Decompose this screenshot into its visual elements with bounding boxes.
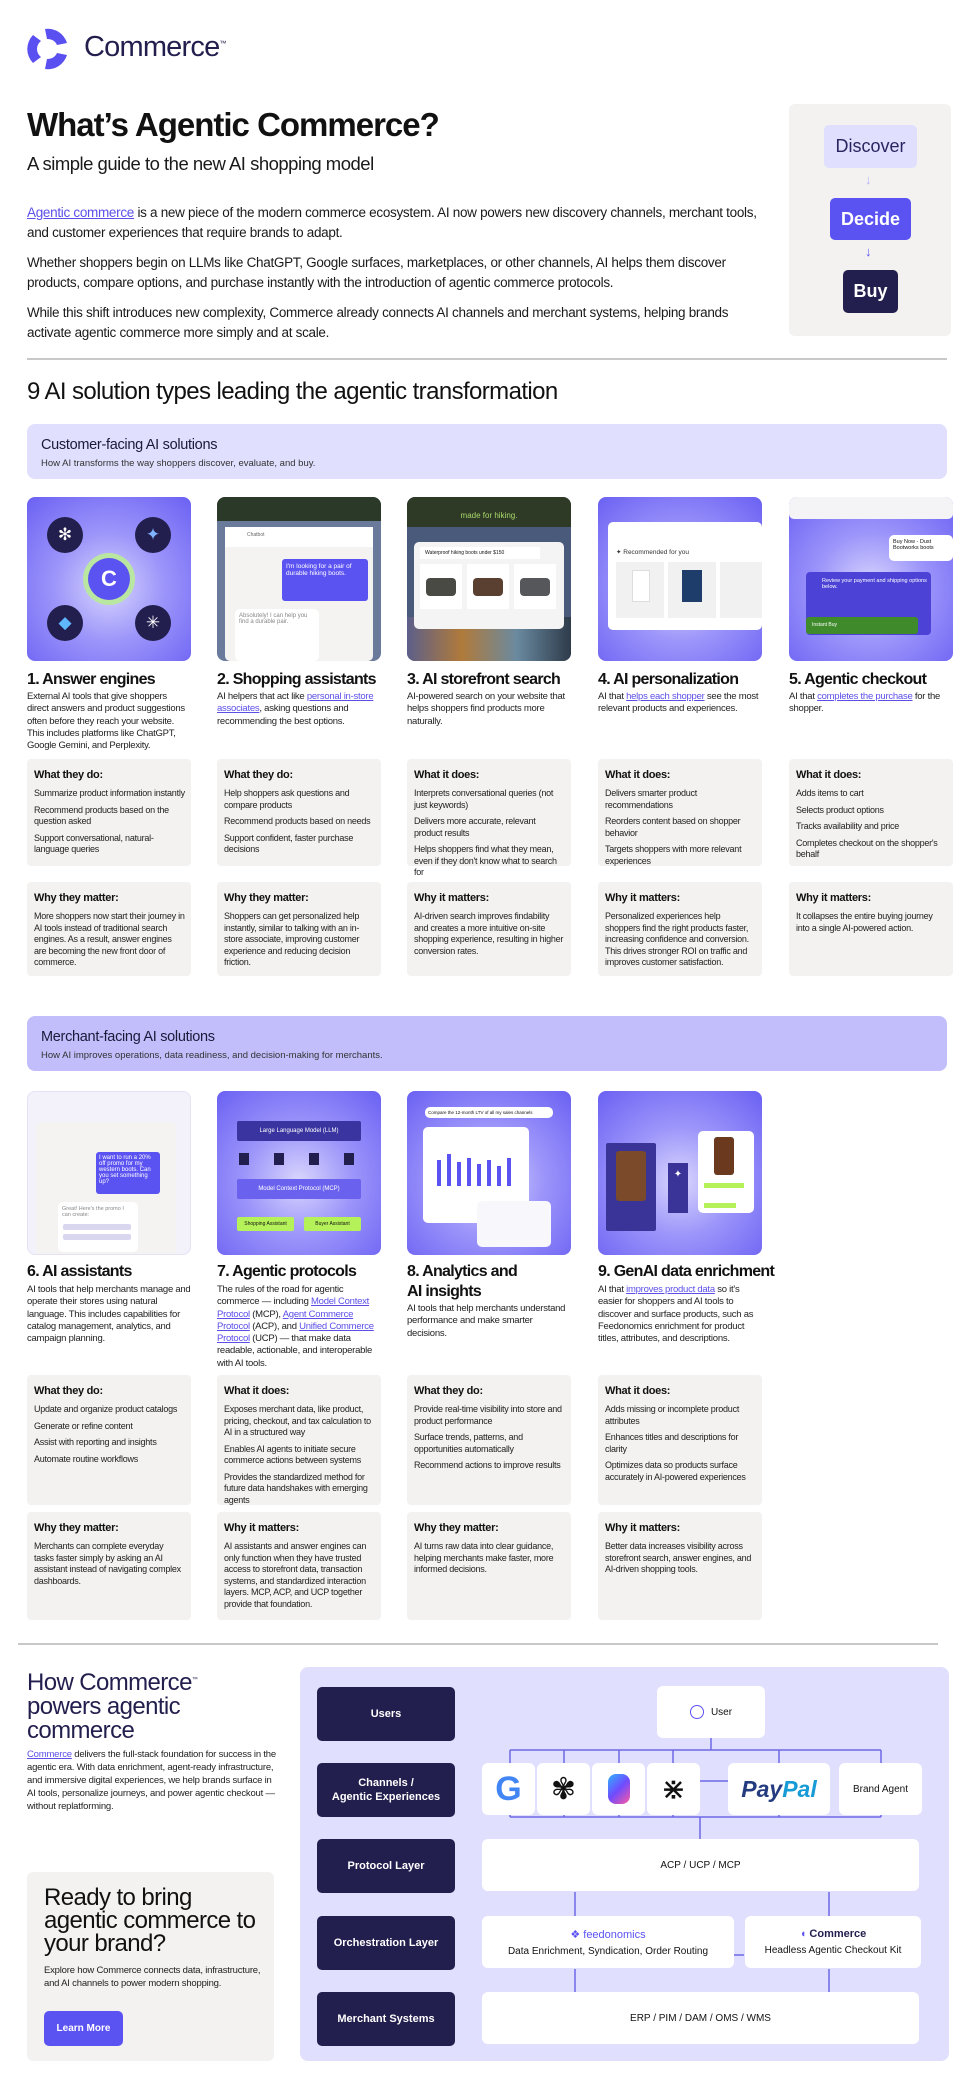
what box 9: Enhances titles and descriptions for clarity [605,1432,738,1454]
card 1 image: answer engines: ✦ [146,525,160,544]
why box 8: AI turns raw data into clear guidance, helping merchants make faster, more informed decisions. [414,1541,553,1574]
what box 1: Recommend products based on the question asked [34,804,169,826]
panel: discover decide buy flow: ↓ [865,172,872,187]
panel: discover decide buy flow: Decide [841,208,900,228]
heading: how commerce powers: How Commerce™ [27,1669,197,1696]
card 1 image: answer engines [27,497,191,661]
why box 5: It collapses the entire buying journey into a single AI-powered action. [796,911,933,932]
why box 4 [598,882,762,976]
panel: CTA: Explore how Commerce connects data, infrastructure, and AI channels to power modern shopping. [44,1965,260,1989]
label: protocol: Protocol Layer [347,1860,425,1872]
logo: paypal: Pal [782,1776,817,1802]
logo [27,28,226,70]
why box 5 [789,882,953,976]
what box 4: Reorders content based on shopper behavior [605,816,740,838]
card 8 image: analytics: Compare the 12-month LTV of all my sales channels [428,1110,532,1115]
text: The rules of the road for agentic commerce — including Model Context Protocol (MCP), Agent Commerce Protocol (ACP), and Unified Commerce Protocol (UCP) — that make data readable, actionable, and interoperable with AI tools. [217,1284,374,1369]
why box 9: Why it matters: [605,1522,680,1534]
card 1 image: answer engines: ◆ [58,613,72,632]
card 5 image: agentic checkout: Buy Now - Dust Bootworks boots [893,539,934,551]
section heading: 9 AI solution types leading the agentic transformation [27,378,558,405]
label: channels [317,1763,455,1817]
why box 2 [217,882,381,976]
what box 2: What they do: [224,769,293,781]
what box 1 [27,759,191,866]
card 7 image: agentic protocols: Model Context Protocol (MCP) [258,1186,340,1192]
panel: customer-facing header: How AI transforms the way shoppers discover, evaluate, and buy. [41,458,315,469]
card 7 image: agentic protocols [217,1091,381,1255]
panel: discover decide buy flow: Discover [835,136,906,156]
what box 7 [217,1375,381,1505]
box: feedonomics: Data Enrichment, Syndication, Order Routing [508,1946,708,1956]
why box 1 [27,882,191,976]
card 1 image: answer engines: C [101,566,117,591]
box: user: User [711,1706,732,1718]
what box 3: Delivers more accurate, relevant product results [414,816,536,838]
what box 7: Enables AI agents to initiate secure commerce actions between systems [224,1444,361,1465]
what box 6: Generate or refine content [34,1420,133,1430]
box: user [657,1686,765,1738]
why box 6: Merchants can complete everyday tasks faster simply by asking an AI assistant instead of navigating complex dashboards. [34,1541,181,1586]
panel: merchant-facing header: How AI improves operations, data readiness, and decision-making for merchants. [41,1050,383,1061]
card 6 text: 6. AI assistants [27,1263,132,1280]
intro text: Agentic commerce is a new piece of the modern commerce ecosystem. AI now powers new discovery channels, merchant tools, and customer experiences that require brands to adapt. [27,205,757,240]
why box 6 [27,1512,191,1620]
icon: perplexity [647,1763,700,1815]
button: learn more [44,2011,123,2046]
box: commerce checkout kit: Headless Agentic Checkout Kit [765,1945,901,1956]
panel: discover decide buy flow [789,104,951,336]
card 5 image: agentic checkout: Review your payment and shipping options below. [822,578,927,590]
why box 8: Why they matter: [414,1522,498,1534]
label: protocol [317,1839,455,1893]
what box 1: Summarize product information instantly [34,788,185,798]
logo: paypal: Pay [741,1776,782,1802]
what box 6: Assist with reporting and insights [34,1437,157,1447]
card 8 text: 8. Analytics and [407,1263,517,1280]
box: merchant systems [482,1992,919,2044]
what box 6: Automate routine workflows [34,1454,138,1464]
why box 7: AI assistants and answer engines can only function when they have trusted access to storefront data, transaction systems, and standardized interaction layers. MCP, ACP, and UCP together provide that foundation. [224,1541,366,1608]
card 1 image: answer engines: ✻ [58,525,72,544]
heading: how commerce powers [27,1669,198,1744]
why box 2: Shoppers can get personalized help instantly, similar to talking with an in-store associate, improving customer experience and reducing decision friction. [224,911,359,967]
why box 1: Why they matter: [34,892,118,904]
panel: discover decide buy flow: Buy [853,281,888,301]
label: channels: Channels / [358,1777,414,1789]
icon: openai [537,1763,590,1815]
connector lines [509,1738,882,1992]
card 5 image: agentic checkout [789,497,953,661]
what box 7: Exposes merchant data, like product, pricing, checkout, and tax calculation to AI in a structured way [224,1404,371,1437]
box: protocols: ACP / UCP / MCP [660,1860,741,1870]
what box 4: Targets shoppers with more relevant experiences [605,844,741,866]
why box 6: Why they matter: [34,1522,118,1534]
icon: copilot [592,1763,645,1815]
text: External AI tools that give shoppers direct answers and product suggestions often before they reach your website. This includes platforms like ChatGPT, Google Gemini, and Perplexity. [27,691,185,751]
why box 1: More shoppers now start their journey in AI tools instead of traditional search engines. As a result, answer engines are becoming the new front door of commerce. [34,911,185,967]
card 2 image: shopping assistants: Chatbot [247,532,265,538]
card 2 image: shopping assistants [217,497,381,661]
why box 2: Why they matter: [224,892,308,904]
why box 4: Why it matters: [605,892,680,904]
box: protocols [482,1839,919,1891]
what box 9: Optimizes data so products surface accurately in AI-powered experiences [605,1460,746,1482]
what box 6: Update and organize product catalogs [34,1404,177,1414]
what box 7: Provides the standardized method for future data handshakes with emerging agents [224,1472,368,1504]
what box 3: Helps shoppers find what they mean, even if they don't know what to search for [414,844,557,877]
what box 5: Adds items to cart [796,788,864,798]
card 2 text: 2. Shopping assistants [217,671,376,688]
what box 3 [407,759,571,866]
card 7 image: agentic protocols: Large Language Model (LLM) [259,1128,339,1134]
card 9 image: data enrichment [598,1091,762,1255]
card 6 image: AI assistants: Great! Here's the promo I can create: [62,1206,124,1218]
what box 1: What they do: [34,769,103,781]
what box 5: Selects product options [796,804,884,814]
what box 8: Recommend actions to improve results [414,1460,561,1470]
text: how commerce description: Commerce delivers the full-stack foundation for success in the agentic era. With data enrichment, agent-ready infrastructure, and immersive digital experiences, we help brands surface in AI tools, personalize journeys, and power agentic checkout — without replatforming. [27,1749,276,1812]
card 2 image: shopping assistants: Absolutely! I can help you find a durable pair. [239,613,307,625]
card 3 text: 3. AI storefront search [407,671,560,688]
what box 8: Provide real-time visibility into store and product performance [414,1404,562,1426]
card 1 image: answer engines: ✳ [146,613,160,632]
card 8 text [407,1263,517,1300]
what box 6 [27,1375,191,1505]
panel: discover decide buy flow: ↓ [865,244,872,259]
why box 8 [407,1512,571,1620]
what box 4: Delivers smarter product recommendations [605,788,697,810]
card 7 image: agentic protocols: Buyer Assistant [315,1221,350,1227]
what box 5 [789,759,953,866]
what box 8: Surface trends, patterns, and opportunities automatically [414,1432,523,1454]
icon: google: G [495,1770,522,1808]
label: orchestration [317,1916,455,1970]
why box 9 [598,1512,762,1620]
what box 2: Help shoppers ask questions and compare products [224,788,349,810]
label: orchestration: Orchestration Layer [334,1937,438,1949]
card 3 image: storefront search: made for hiking. [461,511,517,520]
icon: perplexity: ⋇ [661,1772,686,1806]
label: users: Users [371,1708,401,1720]
icon: openai: ✾ [551,1772,576,1806]
what box 5: What it does: [796,769,861,781]
logo: Commerce™ [84,31,226,63]
intro text: Whether shoppers begin on LLMs like ChatGPT, Google surfaces, marketplaces, or other channels, AI helps them discover products, compare options, and purchase instantly with the introduction of agentic commerce protocols. [27,255,726,290]
panel: CTA [27,1872,274,2061]
label: merchant systems [317,1992,455,2046]
what box 5: Completes checkout on the shopper's behalf [796,838,938,859]
what box 2: Support confident, faster purchase decisions [224,832,353,854]
panel: merchant-facing header: Merchant-facing AI solutions [41,1029,215,1045]
diagram: architecture [300,1667,949,2061]
what box 1: Support conversational, natural-language queries [34,832,154,854]
panel: customer-facing header: Customer-facing AI solutions [41,437,217,453]
card 4 image: personalization: ✦ Recommended for you [616,549,689,556]
box: brand agent [839,1763,922,1815]
box: merchant systems: ERP / PIM / DAM / OMS / WMS [630,2012,771,2024]
logo: paypal [728,1763,830,1815]
what box 5: Tracks availability and price [796,821,899,831]
what box 8: What they do: [414,1385,483,1397]
card 1 text: 1. Answer engines [27,671,155,688]
text: AI tools that help merchants understand performance and make smarter decisions. [407,1303,565,1339]
why box 7 [217,1512,381,1620]
box: feedonomics [482,1916,734,1968]
why box 3 [407,882,571,976]
box: feedonomics: ❖ feedonomics [570,1928,646,1940]
label: merchant systems: Merchant Systems [337,2013,435,2025]
what box 4: What it does: [605,769,670,781]
card 7 image: agentic protocols: Shopping Assistant [244,1221,287,1227]
intro text [27,205,757,340]
what box 2: Recommend products based on needs [224,816,370,826]
card 9 text: 9. GenAI data enrichment [598,1263,774,1280]
card 5 image: agentic checkout: Instant Buy [812,622,837,628]
what box 3: Interprets conversational queries (not just keywords) [414,788,553,810]
what box 7: What it does: [224,1385,289,1397]
box: commerce checkout kit: ◖ Commerce [800,1928,866,1940]
card 4 text: 4. AI personalization [598,671,738,688]
what box 9: What it does: [605,1385,670,1397]
title: What’s Agentic Commerce? [27,106,439,143]
why box 9: Better data increases visibility across storefront search, answer engines, and AI-driven shopping tools. [605,1541,751,1574]
card 5 text: 5. Agentic checkout [789,671,926,688]
text: AI tools that help merchants manage and operate their stores using natural language. This includes capabilities for catalog management, analytics, and campaign planning. [27,1284,190,1344]
card 6 image: AI assistants: I want to run a 20% off promo for my western boots. Can you set something up? [99,1155,151,1185]
label: users [317,1687,455,1741]
card 9 image: data enrichment: ✦ [674,1169,682,1180]
what box 4 [598,759,762,866]
card 3 image: storefront search: Waterproof hiking boots under $150 [425,550,504,556]
card 3 image: storefront search [407,497,571,661]
icon: google [482,1763,535,1815]
panel: CTA: Ready to bring agentic commerce to your brand? [44,1884,255,1957]
why box 5: Why it matters: [796,892,871,904]
why box 7: Why it matters: [224,1522,299,1534]
text: AI that helps each shopper see the most relevant products and experiences. [598,691,758,714]
subtitle: A simple guide to the new AI shopping model [27,153,374,174]
what box 6: What they do: [34,1385,103,1397]
why box 3: Why it matters: [414,892,489,904]
text: AI helpers that act like personal in-store associates, asking questions and recommending the best options. [217,691,373,727]
box: brand agent: Brand Agent [853,1784,908,1794]
label: channels: Agentic Experiences [332,1791,440,1803]
card 2 image: shopping assistants: I'm looking for a pair of durable hiking boots. [286,563,352,577]
heading: how commerce powers: powers agentic [27,1693,180,1720]
card 8 image: analytics [407,1091,571,1255]
card 7 text: 7. Agentic protocols [217,1263,356,1280]
card 4 image: personalization [598,497,762,661]
heading: how commerce powers: commerce [27,1717,134,1744]
panel: customer-facing header [27,424,947,479]
box: commerce checkout kit [745,1916,921,1968]
why box 3: AI-driven search improves findability and creates a more intuitive on-site shopping experience, resulting in higher conversion rates. [414,911,563,956]
why box 4: Personalized experiences help shoppers find the right products faster, increasing confidence and conversion. This drives stronger ROI on traffic and improves customer satisfaction. [605,911,749,967]
text: AI-powered search on your website that helps shoppers find products more naturally. [407,691,565,727]
what box 9 [598,1375,762,1505]
what box 3: What it does: [414,769,479,781]
what box 2 [217,759,381,866]
card 8 text: AI insights [407,1283,481,1300]
panel: merchant-facing header [27,1016,947,1071]
icon: commerce logo [27,28,67,70]
text: AI that completes the purchase for the shopper. [789,691,940,714]
intro text: While this shift introduces new complexity, Commerce already connects AI channels and merchant systems, helping brands activate agentic commerce more simply and at scale. [27,305,728,340]
what box 9: Adds missing or incomplete product attributes [605,1404,739,1426]
button: learn more: Learn More [57,2023,110,2034]
card 6 image: AI assistants [27,1091,191,1255]
text: AI that improves product data so it's easier for shoppers and AI tools to discover and surface products, such as Feedonomics enrichment for product titles, attributes, and descriptions. [598,1284,753,1344]
what box 8 [407,1375,571,1505]
